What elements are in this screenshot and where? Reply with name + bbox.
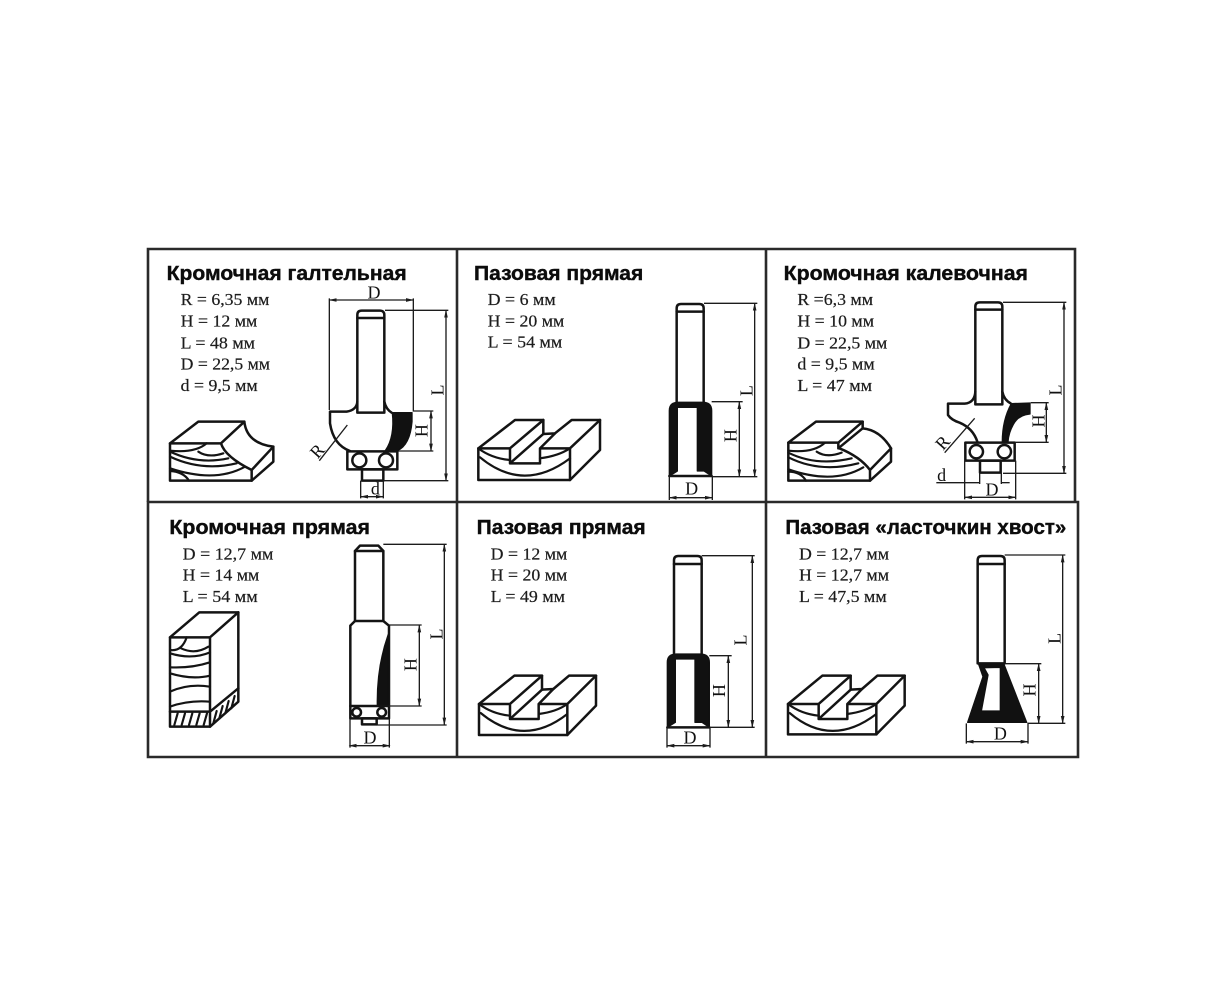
router bit (350, 546, 389, 724)
wood sample: groove (478, 420, 600, 480)
panel: Кромочная калевочная (784, 262, 1066, 500)
heading: Кромочная прямая (169, 516, 370, 539)
specifications: D = 12,7 мм (183, 544, 274, 563)
specifications (797, 290, 888, 395)
dimension lines: D (367, 282, 380, 302)
panel: Кромочная прямая (169, 516, 447, 748)
dimension lines: H (411, 424, 431, 437)
heading: Пазовая «ласточкин хвост» (785, 516, 1066, 539)
specifications (183, 544, 274, 606)
dimension lines: L (1045, 384, 1065, 395)
router bit (330, 311, 412, 481)
specifications: d = 9,5 мм (181, 376, 258, 395)
router bit (669, 304, 712, 476)
router bit (667, 556, 709, 727)
specifications: D = 12,7 мм (799, 544, 889, 563)
dimension lines: D (985, 480, 998, 500)
specifications: H = 14 мм (183, 566, 260, 585)
specifications (181, 290, 270, 395)
dimension lines (669, 303, 757, 500)
panel: Пазовая «ласточкин хвост» (785, 516, 1066, 744)
router bit (968, 556, 1027, 722)
specifications: D = 12 мм (491, 544, 568, 563)
specifications: R =6,3 мм (797, 290, 873, 309)
dimension lines (966, 555, 1065, 744)
panel: Пазовая прямая 12 мм (477, 516, 755, 748)
dimension lines: L (731, 634, 751, 645)
dimension lines (306, 282, 448, 498)
specifications: L = 48 мм (181, 333, 255, 352)
specifications: H = 10 мм (797, 312, 874, 331)
specifications: L = 54 мм (488, 333, 563, 352)
specifications (491, 544, 568, 606)
dimension lines (667, 556, 755, 748)
wood sample: ogee edge (788, 422, 891, 481)
specifications: L = 54 мм (183, 587, 258, 606)
specifications: H = 12,7 мм (799, 566, 889, 585)
specifications (488, 290, 565, 352)
specifications: R = 6,35 мм (181, 290, 270, 309)
dimension lines: D (363, 727, 376, 747)
dimension lines: H (401, 658, 421, 671)
specifications: D = 6 мм (488, 290, 556, 309)
wood sample: groove (479, 676, 596, 735)
heading: Кромочная галтельная (167, 262, 407, 285)
wood sample: cove edge (170, 422, 273, 481)
specifications: H = 20 мм (491, 566, 568, 585)
router bit (948, 302, 1030, 473)
specifications: d = 9,5 мм (797, 355, 875, 374)
dimension lines (349, 544, 447, 748)
specifications: L = 47,5 мм (799, 587, 887, 606)
table frame (148, 249, 1078, 757)
dimension lines: D (685, 478, 698, 498)
dimension lines: R (931, 431, 954, 454)
dimension lines: H (721, 429, 741, 442)
specifications: L = 49 мм (491, 587, 565, 606)
dimension lines: d (371, 478, 380, 498)
dimension lines: H (1020, 683, 1040, 696)
dimension lines: L (1045, 633, 1065, 644)
panel: Кромочная галтельная (167, 262, 448, 498)
dimension lines (931, 302, 1066, 500)
dimension lines: L (737, 385, 757, 396)
panel: Пазовая прямая 6 мм (474, 262, 757, 500)
dimension lines: H (1029, 414, 1049, 427)
specifications: H = 12 мм (181, 312, 258, 331)
dimension lines: L (427, 628, 447, 639)
specifications: D = 22,5 мм (181, 355, 270, 374)
dimension lines: D (683, 727, 696, 747)
heading: Кромочная калевочная (784, 262, 1028, 285)
wood sample: groove (788, 676, 905, 734)
dimension lines: d (937, 465, 946, 485)
heading: Пазовая прямая (477, 516, 646, 539)
wood sample: straight edge (170, 612, 238, 727)
dimension lines: L (427, 384, 447, 395)
specifications: L = 47 мм (797, 376, 872, 395)
specifications (799, 544, 889, 606)
dimension lines: R (306, 440, 329, 462)
heading: Пазовая прямая (474, 262, 643, 285)
specifications: H = 20 мм (488, 312, 565, 331)
specifications: D = 22,5 мм (797, 333, 888, 352)
dimension lines: D (994, 723, 1007, 743)
dimension lines: H (709, 684, 729, 697)
